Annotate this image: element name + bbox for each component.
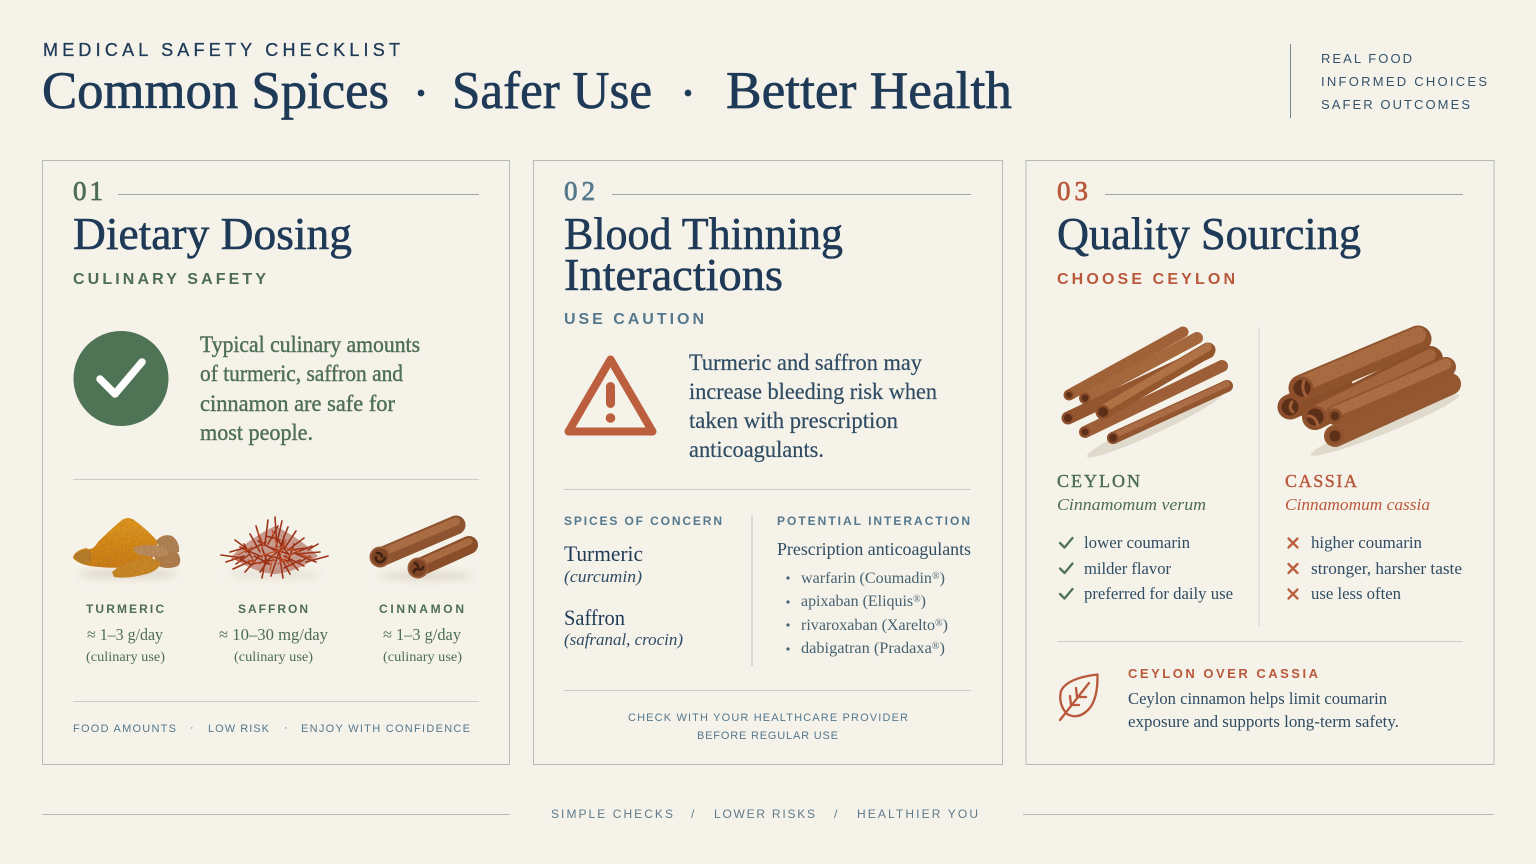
spice: saffron: (culinary use) xyxy=(234,650,313,665)
subheading: use caution: USE CAUTION xyxy=(564,311,704,328)
card number 03: 03 xyxy=(1057,176,1088,206)
heading: blood thinning interactions xyxy=(564,208,843,300)
checklist: cassia drawbacks: use less often xyxy=(1311,584,1401,603)
main title: Better Health xyxy=(726,62,1012,120)
drug list: apixaban (Eliquis xyxy=(801,593,913,610)
text: dosing statement: most people. xyxy=(200,420,313,445)
footer tagline: / xyxy=(834,807,838,821)
column: cassia xyxy=(1285,471,1462,603)
spice: cinnamon: (culinary use) xyxy=(383,650,462,665)
column: spices of concern: (safranal, crocin) xyxy=(564,630,683,649)
header tagline: SAFER OUTCOMES xyxy=(1321,97,1470,112)
text: dosing statement: of turmeric, saffron and xyxy=(200,361,403,386)
panel footer note: LOW RISK xyxy=(208,723,270,735)
panel footer note: FOOD AMOUNTS xyxy=(73,723,176,735)
checklist: ceylon benefits: milder flavor xyxy=(1084,559,1171,578)
drug list: ) xyxy=(940,570,945,587)
footer tagline: LOWER RISKS xyxy=(714,807,815,821)
panel: dietary dosing xyxy=(42,160,510,764)
drug list: rivaroxaban (Xarelto xyxy=(801,617,935,634)
spice: saffron: SAFFRON xyxy=(238,602,308,616)
spice: saffron xyxy=(219,602,328,665)
spice: turmeric: TURMERIC xyxy=(86,602,164,616)
drug list: ® xyxy=(913,594,921,605)
illustration: cassia cinnamon sticks xyxy=(1280,335,1462,462)
column: potential interaction xyxy=(777,514,971,657)
text: dosing statement: cinnamon are safe for xyxy=(200,391,395,416)
column: potential interaction: Prescription anticoagulants xyxy=(777,539,971,559)
column: spices of concern: (curcumin) xyxy=(564,567,642,586)
panel footer note: CHECK WITH YOUR HEALTHCARE PROVIDER xyxy=(628,712,908,724)
spice: saffron: ≈ 10–30 mg/day xyxy=(219,625,328,644)
subheading: choose ceylon: CHOOSE CEYLON xyxy=(1057,271,1235,288)
icon: saffron xyxy=(221,517,328,578)
checklist: cassia drawbacks: higher coumarin xyxy=(1311,533,1422,552)
panel footer note: · xyxy=(190,722,194,734)
subheading: culinary safety: CULINARY SAFETY xyxy=(73,271,266,288)
drug list: ) xyxy=(943,617,948,634)
drug list: ) xyxy=(940,640,945,657)
column: cassia: Cinnamomum cassia xyxy=(1285,495,1430,514)
main title: Safer Use xyxy=(452,62,652,120)
text: dosing statement xyxy=(200,332,420,445)
column: ceylon xyxy=(1057,471,1233,603)
icon: leaf xyxy=(1060,674,1098,720)
card number 02: 02 xyxy=(564,176,595,206)
column: spices of concern xyxy=(564,514,722,649)
panel: quality sourcing xyxy=(1026,160,1494,764)
spice: cinnamon xyxy=(379,602,464,665)
spice: turmeric: (culinary use) xyxy=(86,650,165,665)
callout: ceylon over cassia: exposure and supports long-term safety. xyxy=(1128,712,1399,731)
checklist: ceylon benefits: preferred for daily use xyxy=(1084,584,1233,603)
heading: blood thinning interactions: Interactions xyxy=(564,249,783,300)
text: interaction warning: Turmeric and saffron may xyxy=(689,350,922,375)
checklist: ceylon benefits: lower coumarin xyxy=(1084,533,1190,552)
column: spices of concern: Turmeric xyxy=(564,541,643,566)
text: interaction warning xyxy=(689,350,937,462)
drug list: ® xyxy=(932,571,940,582)
spice: cinnamon: ≈ 1–3 g/day xyxy=(383,625,461,644)
text: interaction warning: increase bleeding risk when xyxy=(689,379,937,404)
footer tagline: HEALTHIER YOU xyxy=(857,807,978,821)
drug list: dabigatran (Pradaxa xyxy=(801,640,929,657)
panel footer note xyxy=(73,722,470,735)
panel: blood thinning interactions xyxy=(534,160,1002,764)
drug list: ) xyxy=(921,593,926,610)
icon: warning triangle xyxy=(568,360,652,432)
footer tagline xyxy=(42,807,1494,821)
illustration: ceylon cinnamon sticks xyxy=(1063,332,1227,464)
spice doses xyxy=(86,602,464,665)
callout: ceylon over cassia xyxy=(1128,666,1399,731)
text: dosing statement: Typical culinary amounts xyxy=(200,332,420,357)
callout: ceylon over cassia: CEYLON OVER CASSIA xyxy=(1128,666,1319,681)
header tagline: INFORMED CHOICES xyxy=(1321,74,1487,89)
spice: turmeric xyxy=(86,602,165,665)
column: spices of concern: Saffron xyxy=(564,605,625,630)
column: ceylon: Cinnamomum verum xyxy=(1057,495,1206,514)
text: interaction warning: anticoagulants. xyxy=(689,437,824,462)
icon: turmeric xyxy=(73,518,180,578)
spice: turmeric: ≈ 1–3 g/day xyxy=(87,625,163,644)
main title: Common Spices xyxy=(42,62,389,120)
drug list: warfarin (Coumadin xyxy=(801,570,931,587)
icon: cinnamon quills xyxy=(370,522,473,579)
text: interaction warning: taken with prescription xyxy=(689,408,898,433)
checklist: cassia drawbacks: stronger, harsher taste xyxy=(1311,559,1462,578)
heading: quality sourcing: Quality Sourcing xyxy=(1057,208,1361,259)
header tagline: REAL FOOD xyxy=(1321,51,1412,66)
column: ceylon: CEYLON xyxy=(1057,471,1140,491)
column: cassia: CASSIA xyxy=(1285,471,1357,491)
panel footer note xyxy=(628,712,908,742)
footer tagline: / xyxy=(691,807,695,821)
drug list xyxy=(786,570,948,657)
checklist: cassia drawbacks xyxy=(1288,533,1462,603)
column: spices of concern: SPICES OF CONCERN xyxy=(564,514,722,528)
spice: cinnamon: CINNAMON xyxy=(379,602,464,616)
column: potential interaction: POTENTIAL INTERACTION xyxy=(777,514,970,528)
panel footer note: BEFORE REGULAR USE xyxy=(697,730,838,742)
drug list: ® xyxy=(932,641,940,652)
card number 01: 01 xyxy=(73,176,103,206)
header eyebrow: MEDICAL SAFETY CHECKLIST xyxy=(43,40,400,60)
main title xyxy=(42,62,1012,120)
checklist: ceylon benefits xyxy=(1060,533,1233,603)
panel footer note: ENJOY WITH CONFIDENCE xyxy=(301,723,470,735)
heading: dietary dosing: Dietary Dosing xyxy=(73,208,352,259)
icon: check circle xyxy=(74,331,168,426)
callout: ceylon over cassia: Ceylon cinnamon helps limit coumarin xyxy=(1128,689,1387,708)
header tagline xyxy=(1290,44,1487,118)
drug list: ® xyxy=(935,618,943,629)
footer tagline: SIMPLE CHECKS xyxy=(551,807,673,821)
heading: blood thinning interactions: Blood Thinning xyxy=(564,208,843,259)
panel footer note: · xyxy=(284,722,288,734)
